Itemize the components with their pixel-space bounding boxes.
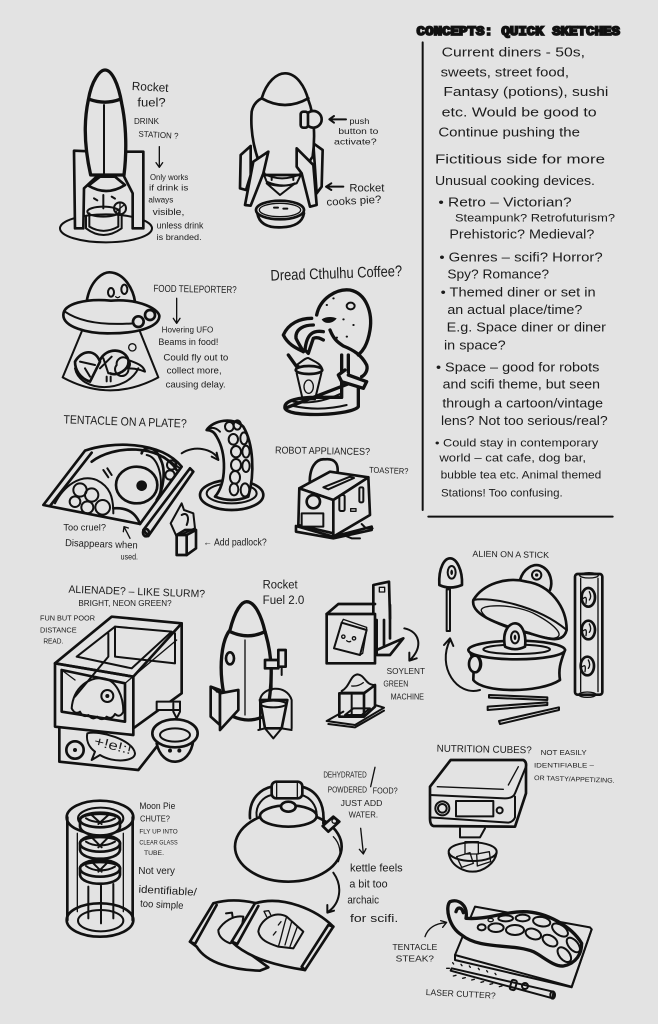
annotation: tentacle steak: STEAK? <box>396 954 434 964</box>
annotation: nutrition cubes: NOT EASILY <box>541 748 587 757</box>
bullet: themed diner: • Themed diner or set in <box>441 286 596 300</box>
bullet: retro: • Retro – Victorian? <box>438 196 572 210</box>
sketch: rocket fuel 2.0 <box>211 577 305 738</box>
heading: tentacle on a plate: TENTACLE ON A PLATE? <box>63 412 187 431</box>
icon: cthulhu coffee machine <box>283 290 371 414</box>
bullet: contemporary: • Could stay in contemporary <box>435 438 599 450</box>
annotation: moon pie chute: CHUTE? <box>140 813 170 823</box>
bullet: space: lens? Not too serious/real? <box>441 414 608 428</box>
icon: food pouches <box>190 900 333 971</box>
sketch: alien on a stick <box>439 549 602 724</box>
annotation: tentacle steak <box>392 921 447 964</box>
annotation: soylent green machine <box>383 666 426 701</box>
icon: robot toaster <box>296 459 373 538</box>
annotation: rocket fuel: visible, <box>153 207 184 217</box>
annotation: rocket fuel 2.0: Rocket <box>263 577 298 591</box>
annotation: food teleporter <box>153 284 237 389</box>
icon: laser cutter <box>447 963 555 999</box>
annotation: moon pie chute: TUBE. <box>144 850 164 857</box>
icon: rocket dispenser <box>211 602 292 738</box>
annotation: dehydrated food: POWDERED <box>328 785 367 794</box>
intro text block <box>435 45 608 188</box>
bullet: contemporary: bubble tea etc. Animal themed <box>441 469 601 481</box>
annotation: moon pie chute: too simple <box>140 899 184 912</box>
icon: tentacle slice dispenser <box>43 445 193 536</box>
annotation: rocket fuel: if drink is <box>149 184 188 193</box>
bullet: contemporary <box>435 438 601 500</box>
annotation: alienade: DISTANCE <box>40 626 77 635</box>
icon: tentacle on cutting board <box>448 901 592 987</box>
icon: alienade machine: +!e!:! <box>93 733 133 757</box>
bullet: themed diner: in space? <box>444 338 506 352</box>
sketch: alienade machine <box>40 584 205 770</box>
annotation: moon pie chute: Moon Pie <box>139 801 175 811</box>
arrow <box>404 628 418 661</box>
annotation: push button <box>329 116 379 147</box>
title: CONCEPTS: QUICK SKETCHES <box>417 24 620 39</box>
intro text block: etc. Would be good to <box>442 105 597 120</box>
annotation: rocket fuel: Only works <box>150 173 188 182</box>
icon: alienade machine <box>55 617 198 770</box>
sketch: soylent green machine <box>327 582 426 727</box>
bullet: space: • Space – good for robots <box>436 361 599 375</box>
annotation: kettle archaic <box>347 862 403 925</box>
annotation: too cruel: Disappears when <box>65 538 138 552</box>
annotation: alienade <box>40 584 205 645</box>
sketch: nutrition cubes <box>430 744 615 872</box>
annotation: rocket cooks pie: cooks pie? <box>326 194 382 209</box>
intro text block: sweets, street food, <box>441 65 569 80</box>
bullet: themed diner <box>441 286 606 352</box>
annotation: dehydrated food: WATER. <box>349 810 378 819</box>
annotation: rocket fuel: DRINK <box>134 117 160 126</box>
annotation: robot appliances: TOASTER? <box>369 465 409 476</box>
annotation: food teleporter: causing delay. <box>166 379 226 389</box>
sketch: dehydrated food kettle <box>190 767 403 971</box>
annotation: push button: push <box>349 116 370 126</box>
annotation: rocket fuel 2.0 <box>263 577 305 607</box>
annotation: add padlock: ← Add padlock? <box>203 538 267 549</box>
annotation: moon pie chute: CLEAR GLASS <box>139 839 178 846</box>
sketch: rocket drink station <box>60 70 204 242</box>
arrow <box>182 449 218 460</box>
panel: notes column <box>417 24 620 517</box>
annotation: push button: activate? <box>334 137 377 147</box>
bullet: genres: • Genres – scifi? Horror? <box>439 251 603 265</box>
bullet: genres: Spy? Romance? <box>447 267 549 281</box>
intro text block: Unusual cooking devices. <box>435 173 595 188</box>
annotation: rocket fuel: always <box>148 195 173 204</box>
annotation: kettle archaic: a bit too <box>349 879 388 891</box>
bullet: space: and scifi theme, but seen <box>443 377 600 391</box>
bullet: retro <box>438 196 615 241</box>
sketch: robot toaster <box>275 445 409 538</box>
annotation: rocket fuel <box>132 79 204 242</box>
heading: alien on a stick: ALIEN ON A STICK <box>472 549 549 560</box>
arrow <box>327 873 339 913</box>
annotation: push button: button to <box>338 126 379 136</box>
icon: alien tube <box>575 573 602 697</box>
bullet: space <box>436 361 608 428</box>
annotation: rocket fuel: fuel? <box>137 96 166 110</box>
annotation: alienade: READ. <box>43 636 63 645</box>
icon: rocket with pie <box>240 73 323 227</box>
annotation: alienade: BRIGHT, NEON GREEN? <box>78 599 172 608</box>
icon: kettle <box>235 782 342 882</box>
annotation: rocket fuel: Rocket <box>132 79 170 95</box>
icon: alien lollipop <box>439 558 462 631</box>
annotation: soylent green machine: GREEN <box>383 679 408 689</box>
annotation: dehydrated food: DEHYDRATED <box>323 770 367 779</box>
annotation: rocket fuel: unless drink <box>157 220 204 230</box>
annotation: alienade: FUN BUT POOR <box>40 614 95 623</box>
arrow <box>444 638 480 691</box>
annotation: tentacle steak: TENTACLE <box>392 943 437 952</box>
annotation: moon pie chute: FLY UP INTO <box>139 828 178 835</box>
annotation: robot appliances <box>275 445 409 476</box>
annotation: rocket fuel 2.0: Fuel 2.0 <box>263 593 305 607</box>
annotation: food teleporter: Beams in food! <box>158 337 218 347</box>
annotation: too cruel: used. <box>121 551 138 561</box>
sketch: dread cthulhu coffee <box>270 263 402 414</box>
icon: spare sticks <box>488 695 559 724</box>
annotation: rocket cooks pie: Rocket <box>349 183 384 195</box>
annotation: kettle archaic: archaic <box>347 895 380 907</box>
sketch: food teleporter UFO <box>63 272 237 390</box>
intro text block: Current diners - 50s, <box>442 45 585 60</box>
annotation: rocket fuel: STATION ? <box>138 129 179 141</box>
icon: padlock <box>171 503 196 555</box>
annotation: food teleporter: collect more, <box>167 365 222 375</box>
icon: alien waffle press <box>468 565 567 690</box>
bullet: genres <box>439 251 603 281</box>
annotation: dehydrated food: FOOD? <box>373 786 398 795</box>
annotation: nutrition cubes: IDENTIFIABLE – <box>534 762 594 769</box>
icon: soylent machine <box>327 582 403 663</box>
bullet: retro: Prehistoric? Medieval? <box>449 227 594 241</box>
intro text block: Continue pushing the <box>438 125 580 140</box>
heading: dread cthulhu coffee: Dread Cthulhu Coffee? <box>270 263 402 285</box>
annotation: too cruel <box>63 523 138 561</box>
bullet: space: through a cartoon/vintage <box>442 396 603 410</box>
annotation: food teleporter: Hovering UFO <box>162 325 214 335</box>
bullet: themed diner: an actual place/time? <box>447 303 582 317</box>
icon: UFO with beam <box>63 272 159 390</box>
annotation: rocket fuel: is branded. <box>157 232 202 242</box>
icon: tentacle on plate <box>200 420 263 510</box>
sketch: rocket pie cooker <box>240 73 384 227</box>
annotation: food teleporter: FOOD TELEPORTER? <box>153 284 237 296</box>
annotation: nutrition cubes: OR TASTY/APPETIZING. <box>534 775 615 785</box>
annotation: soylent green machine: MACHINE <box>391 691 424 701</box>
annotation: dehydrated food <box>323 767 398 854</box>
annotation: too cruel: Too cruel? <box>63 523 106 533</box>
annotation: moon pie chute: identifiable/ <box>138 884 197 899</box>
annotation: dehydrated food: JUST ADD <box>341 799 383 808</box>
icon: rocket drink station <box>60 70 152 242</box>
annotation: rocket cooks pie <box>326 183 384 209</box>
annotation: alienade: ALIENADE? – LIKE SLURM? <box>68 584 205 600</box>
annotation: food teleporter: Could fly out to <box>163 353 228 363</box>
intro text block: Fictitious side for more <box>435 151 605 166</box>
annotation: nutrition cubes: NUTRITION CUBES? <box>437 744 532 756</box>
bullet: contemporary: Stations! Too confusing. <box>441 488 563 500</box>
annotation: nutrition cubes <box>437 744 615 785</box>
icon: cube machine <box>430 760 526 872</box>
bullet: contemporary: world – cat cafe, dog bar, <box>438 453 586 465</box>
annotation: moon pie chute <box>138 801 197 912</box>
annotation: laser cutter: LASER CUTTER? <box>426 987 496 1001</box>
sketch: moon pie chute <box>67 801 197 937</box>
sketch: tentacle on a plate <box>43 412 267 561</box>
sketch: tentacle steak <box>392 901 592 1001</box>
icon: soylent food cube <box>327 674 384 727</box>
bullet: retro: Steampunk? Retrofuturism? <box>455 213 615 225</box>
annotation: moon pie chute: Not very <box>138 866 175 877</box>
annotation: soylent green machine: SOYLENT <box>387 666 426 676</box>
annotation: kettle archaic: kettle feels <box>350 862 403 874</box>
icon: moon pie tube <box>67 801 133 937</box>
intro text block: Fantasy (potions), sushi <box>443 84 608 99</box>
annotation: robot appliances: ROBOT APPLIANCES? <box>275 445 371 458</box>
annotation: kettle archaic: for scifi. <box>350 913 398 925</box>
bullet: themed diner: E.g. Space diner or diner <box>447 321 606 335</box>
